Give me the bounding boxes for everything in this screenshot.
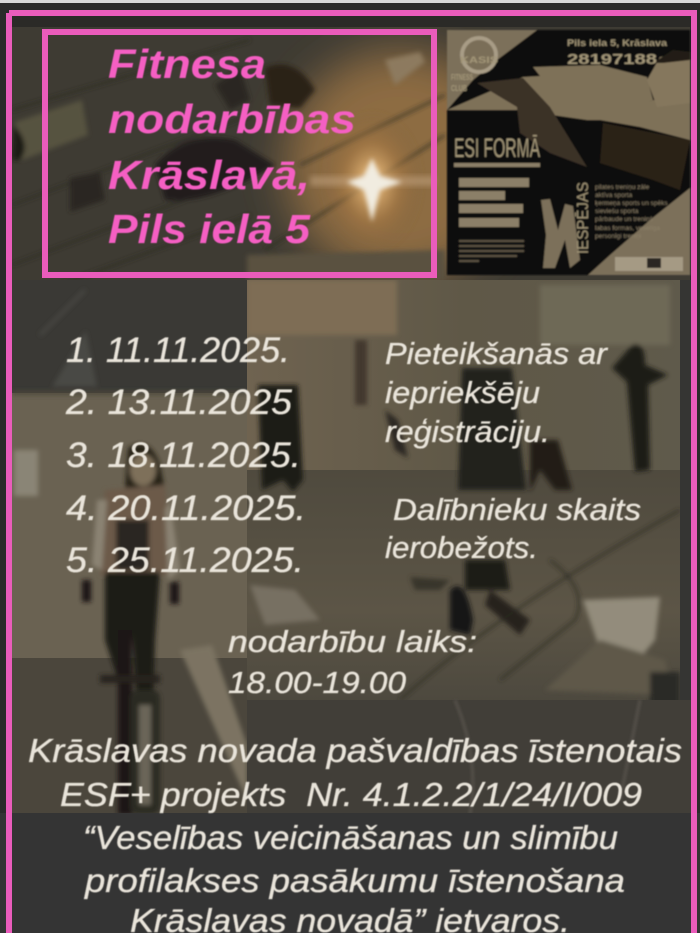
- poster club text line two: CLUB: [451, 84, 467, 93]
- poster small print: [459, 240, 524, 262]
- participant limit note: Dalībnieku skaits: [393, 492, 641, 527]
- poster phone: 28197188: [567, 51, 657, 68]
- background photo: woman on exercise bike: [12, 280, 247, 815]
- poster leg band: [447, 65, 653, 120]
- title: Pils ielā 5: [108, 206, 311, 252]
- participant limit note: [385, 492, 641, 565]
- light flare: [310, 110, 435, 254]
- poster vertical label: IESPĒJAS: [574, 182, 592, 254]
- session time: [228, 624, 477, 700]
- date list: 2. 13.11.2025: [65, 383, 293, 422]
- registration note: iepriekšēju: [385, 375, 540, 410]
- background: dark right strip and lower floor: [247, 280, 691, 814]
- project description: profilakses pasākumu īstenošana: [84, 862, 625, 899]
- poster tan corner shapes: [447, 30, 537, 110]
- project description: Krāslavas novada pašvaldības īstenotais: [28, 732, 682, 769]
- title: nodarbības: [108, 96, 356, 142]
- poster logos: [615, 257, 683, 271]
- poster face: [647, 52, 690, 107]
- poster shorts: [477, 78, 587, 167]
- bottom dark band: [0, 813, 700, 933]
- poster program boxes: [459, 178, 529, 227]
- registration note: Pieteikšanās ar: [385, 336, 609, 371]
- registration note: [385, 336, 609, 449]
- date list: 5. 25.11.2025.: [66, 541, 304, 580]
- poster list: labas formas, veselīga: [595, 225, 660, 232]
- title: Fitnesa: [108, 41, 266, 87]
- session time: 18.00-19.00: [228, 665, 406, 700]
- project description: “Veselības veicināšanas un slimību: [83, 819, 618, 856]
- background photo: group exercise in gym: [247, 280, 680, 707]
- title: [108, 41, 356, 252]
- project description: ESF+ projekts Nr. 4.1.2.2/1/24/I/009: [60, 776, 642, 813]
- date list: [65, 331, 306, 580]
- date list: 1. 11.11.2025.: [66, 331, 290, 370]
- project description: [28, 732, 682, 933]
- poster list: pārbaude un treniņš: [595, 216, 654, 223]
- poster heading: ESI FORMĀ: [454, 133, 540, 163]
- top dark strip inside frame: [12, 16, 691, 27]
- poster badge text: KASIS: [460, 55, 498, 65]
- poster list: sieviešu sporta: [595, 208, 639, 215]
- poster chest and top: [600, 123, 690, 190]
- title: Krāslavā,: [108, 152, 310, 198]
- session time: nodarbību laiks:: [228, 624, 477, 659]
- poster logo: [462, 38, 496, 72]
- poster club text: FITNESS: [451, 73, 473, 82]
- poster list: personīgi treniņi: [595, 233, 641, 240]
- poster list: pilates treniņu zāle: [595, 184, 650, 191]
- poster list: aktīva sporta: [595, 192, 633, 199]
- poster: ESI FORMĀ: [447, 30, 690, 275]
- poster list: ķermeņa sports un spēks: [595, 200, 668, 207]
- participant limit note: ierobežots.: [385, 530, 538, 565]
- background photo: mats with warm light: [12, 27, 690, 285]
- registration note: reģistrāciju.: [385, 414, 550, 449]
- poster address: Pils iela 5, Krāslava: [567, 38, 668, 48]
- date list: 4. 20.11.2025.: [66, 489, 306, 528]
- poster athletes: [541, 199, 580, 268]
- poster list: [595, 184, 668, 240]
- date list: 3. 18.11.2025.: [66, 436, 301, 475]
- title box frame: [45, 32, 434, 275]
